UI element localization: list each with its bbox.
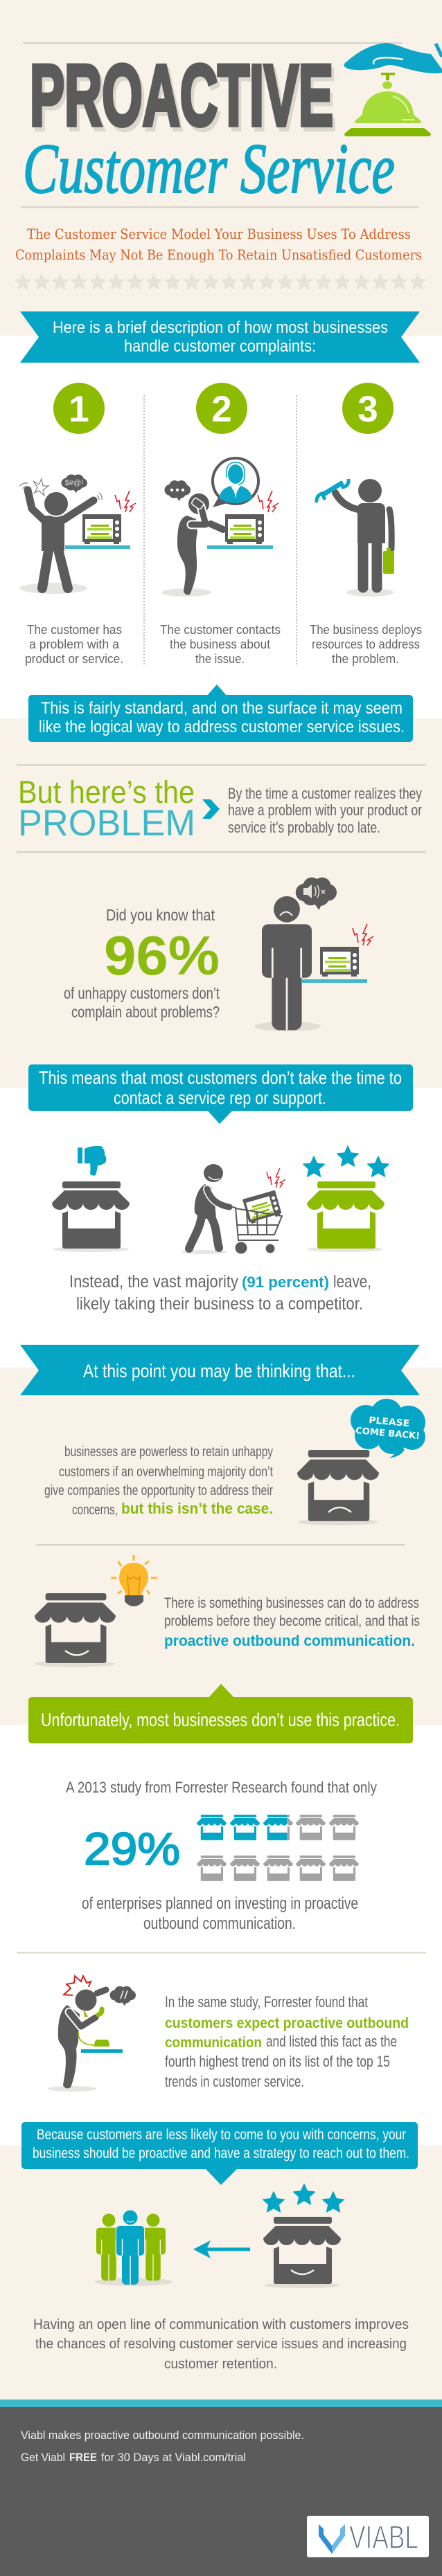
text: same study: customers expect proactive outbound (165, 2015, 409, 2031)
caption 3: resources to address (312, 637, 420, 651)
number badge 3 (342, 383, 394, 434)
step 1 (19, 383, 136, 666)
callout: be proactive (21, 2122, 418, 2185)
text: enterprises investing: of enterprises planned on investing in proactive (82, 1894, 358, 1913)
text: open line of communication: customer retention. (164, 2357, 277, 2372)
footer text: for 30 Days at Viabl.com/trial (101, 2451, 246, 2464)
text: vast majority leave: (91 percent) (242, 1273, 329, 1291)
text: vast majority leave: likely taking their business to a competitor. (76, 1294, 363, 1314)
caption 3: The business deploys (310, 623, 422, 637)
text: open line of communication: the chances of resolving customer service issues and increasing (35, 2337, 407, 2352)
logo: Viabl (307, 2516, 429, 2557)
arrow: chevron (202, 799, 220, 819)
footer text: Viabl makes proactive outbound communication possible. (21, 2429, 304, 2442)
text: same study: communication (165, 2035, 262, 2051)
text: businesses are powerless: businesses are powerless to retain unhappy (64, 1444, 273, 1460)
icon: wrench (317, 479, 348, 502)
stat: 96 percent: of unhappy customers don’t (64, 984, 220, 1002)
callout: don't use this practice (28, 1684, 413, 1743)
text: businesses are powerless: give companies the opportunity to address their (44, 1483, 273, 1498)
speech: thinking dots (164, 480, 191, 501)
stat: 96 percent (64, 906, 220, 1021)
text: same study (165, 1993, 409, 2090)
callout: fairly standard: This is fairly standard, and on the surface it may seem (41, 699, 403, 718)
text: enterprises investing: outbound communication. (143, 1914, 296, 1933)
text: open line of communication (33, 2317, 409, 2372)
heading: but here's the problem: But here’s the (18, 774, 195, 810)
icon: happy customers (95, 2211, 173, 2286)
banner: brief description: Here is a brief description of how most businesses (53, 318, 388, 337)
stat: 29 percent: 29% (84, 1823, 180, 1874)
speech: muted speaker (296, 878, 337, 910)
text: proactive outbound communication (164, 1595, 420, 1649)
icon: five star happy store (263, 2184, 344, 2288)
text: vast majority leave: leave, (333, 1272, 371, 1291)
stat: 96 percent: 96% (104, 925, 220, 986)
icon: happy store with light bulb (35, 1555, 157, 1667)
icon: five star store (303, 1146, 389, 1252)
caption 1: a problem with a (29, 637, 120, 651)
text: same study: fourth highest trend on its list of the top 15 (165, 2053, 390, 2070)
text: forrester study intro: A 2013 study from Forrester Research found that only (66, 1779, 377, 1796)
icon: disliked store (52, 1146, 130, 1252)
speech cloud: please come back (351, 1399, 425, 1458)
caption 2: the business about (170, 637, 270, 651)
text: businesses are powerless: but this isn’t the case. (121, 1500, 273, 1517)
speech cloud: please come back: PLEASE (369, 1415, 410, 1429)
footer text: FREE (69, 2451, 97, 2464)
step 2 (160, 383, 281, 666)
figure: business with wrench (317, 479, 394, 597)
callout: don't take the time: contact a service rep or support. (114, 1087, 326, 1108)
number badge 2 (196, 383, 247, 434)
icon: shopping cart (230, 1206, 282, 1253)
text: enterprises investing (82, 1894, 358, 1933)
figure: angry customer (19, 475, 136, 594)
problem explanation text (228, 785, 422, 836)
text: vast majority leave (69, 1272, 371, 1314)
text: businesses are powerless: customers if an overwhelming majority don’t (59, 1464, 273, 1480)
speech: cursing (61, 475, 87, 493)
speech cloud: please come back: COME BACK! (355, 1426, 421, 1442)
subtitle (15, 226, 422, 263)
icon: thumbs down (78, 1146, 106, 1176)
stat: 96 percent: Did you know that (106, 906, 215, 924)
caption 2: the issue. (195, 652, 245, 666)
callout: fairly standard (28, 684, 413, 742)
figure: customer leaving with cart (182, 1164, 285, 1254)
text: same study: and listed this fact as the (266, 2033, 397, 2050)
text: businesses are powerless: concerns, (72, 1503, 118, 1518)
stat: 96 percent: complain about problems? (71, 1003, 220, 1021)
caption 1: The customer has (27, 623, 122, 637)
logo: Viabl: VIABL (349, 2519, 418, 2555)
figure: silent unhappy customer (254, 878, 373, 1031)
speech: cursing: $#@! (65, 479, 83, 487)
footer text (21, 2429, 304, 2464)
text: same study: trends in customer service. (165, 2073, 304, 2090)
banner: brief description (20, 311, 420, 363)
banner: brief description: handle customer complaints: (124, 337, 316, 356)
figure: frustrated customer at phone (48, 1976, 136, 2092)
caption 1 (25, 623, 123, 666)
footer (0, 2400, 442, 2576)
step 3 (310, 383, 422, 666)
text: open line of communication: Having an open line of communication with customers improves (33, 2317, 409, 2332)
caption 2 (160, 623, 281, 666)
icon: suitcase (383, 548, 394, 574)
problem explanation text: service it’s probably too late. (228, 819, 380, 836)
icon: hand ringing bell (344, 43, 442, 136)
caption 3 (310, 623, 422, 666)
text: proactive outbound communication: proactive outbound communication. (164, 1632, 415, 1649)
number badge 1: 1 (69, 389, 89, 430)
text: businesses are powerless (44, 1444, 273, 1518)
number badge 2: 2 (211, 389, 232, 430)
caption 3: the problem. (332, 652, 399, 666)
footer text: Get Viabl (21, 2451, 65, 2464)
text: vast majority leave: Instead, the vast majority (69, 1272, 238, 1291)
number badge 3: 3 (357, 389, 378, 430)
title block (21, 42, 418, 208)
heading: but here's the problem (17, 764, 426, 853)
icon: support agent bubble (213, 458, 258, 507)
caption 1: product or service. (25, 652, 123, 666)
icon: light bulb (111, 1555, 157, 1606)
banner: at this point (20, 1345, 420, 1395)
column dividers (144, 395, 297, 666)
heading: but here's the problem: PROBLEM (18, 803, 195, 844)
banner: at this point: At this point you may be thinking that... (83, 1361, 355, 1381)
caption 2: The customer contacts (160, 623, 281, 637)
figure: customer on the phone (161, 458, 279, 597)
number badge 1 (53, 383, 105, 434)
arrow: store to customers (193, 2240, 250, 2258)
star divider (15, 274, 425, 289)
pictogram: stores 29 of 100 (197, 1815, 359, 1881)
callout: don't take the time (28, 1064, 413, 1124)
icon: sad store with plea (297, 1399, 425, 1525)
text: same study: In the same study, Forrester found that (165, 1993, 368, 2011)
